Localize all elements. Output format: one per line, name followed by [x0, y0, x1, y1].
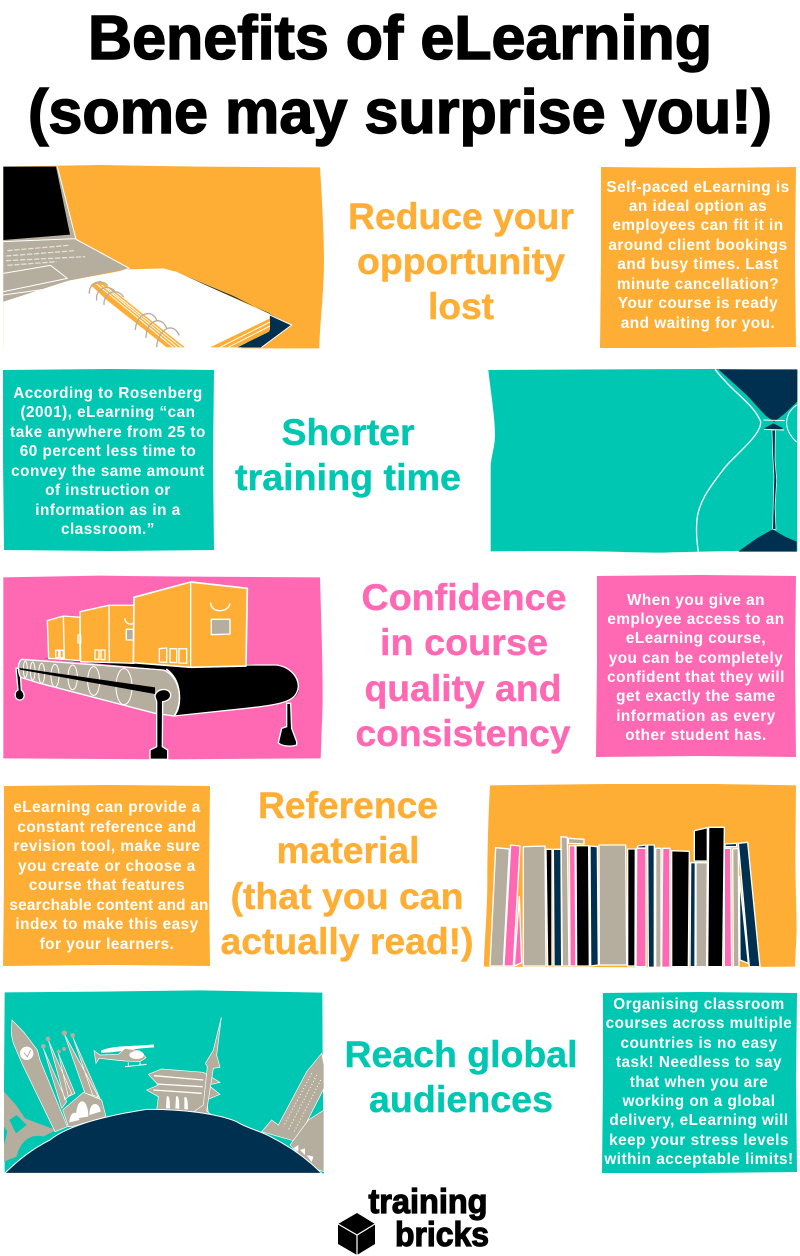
- text box: keep your stress levels: [609, 1132, 789, 1149]
- text box: According to Rosenberg: [13, 385, 203, 402]
- panel: reach global audiences: [4, 990, 797, 1173]
- panel: reduce your opportunity lost: [3, 165, 796, 349]
- text box: 60 percent less time to: [20, 443, 196, 460]
- text box: convey the same amount: [11, 463, 205, 480]
- text box: other student has.: [625, 727, 767, 744]
- text box: employee access to an: [607, 611, 785, 628]
- icon: skyscrapers: [262, 1053, 324, 1172]
- text box: that when you are: [630, 1074, 768, 1091]
- icon: Eiffel tower: [4, 1092, 56, 1162]
- text box: of instruction or: [45, 482, 171, 499]
- text box: index to make this easy: [15, 916, 199, 933]
- text box: take anywhere from 25 to: [10, 424, 206, 441]
- panel: reference material: [3, 784, 797, 967]
- logo: training bricks: [338, 1183, 489, 1255]
- heading: [348, 196, 574, 327]
- text box: Your course is ready: [618, 295, 778, 312]
- text box: and waiting for you.: [621, 315, 775, 332]
- text box: constant reference and: [17, 819, 197, 836]
- illustration: row of books: [484, 784, 797, 967]
- text box: countries is no easy: [620, 1035, 778, 1052]
- text box: [596, 575, 796, 757]
- heading: [220, 785, 474, 962]
- globe: [5, 1109, 322, 1173]
- text box: you create or choose a: [18, 858, 196, 875]
- heading: Reference: [258, 785, 438, 826]
- heading: Shorter: [282, 412, 414, 453]
- wordmark: bricks: [395, 1216, 489, 1254]
- heading: in course: [380, 622, 548, 663]
- text box: eLearning can provide a: [13, 799, 201, 816]
- text box: information as in a: [35, 502, 181, 519]
- text box: revision tool, make sure: [13, 838, 201, 855]
- text box: working on a global: [621, 1093, 776, 1110]
- heading: [356, 577, 571, 754]
- text box: eLearning course,: [626, 630, 766, 647]
- icon: cube: [338, 1213, 375, 1255]
- icon: Big Ben: [11, 1020, 67, 1132]
- text box: [600, 167, 796, 348]
- heading: opportunity: [357, 241, 565, 282]
- text box: Organising classroom: [613, 996, 785, 1013]
- text box: [3, 785, 210, 966]
- illustration: laptop and ring binder: [3, 165, 324, 349]
- heading: [344, 1034, 578, 1120]
- heading: audiences: [369, 1079, 553, 1120]
- text box: [3, 369, 214, 551]
- text box: and busy times. Last: [617, 256, 779, 273]
- text box: an ideal option as: [629, 198, 767, 215]
- text box: task! Needless to say: [616, 1054, 782, 1071]
- text box: searchable content and an: [9, 897, 209, 914]
- panel: shorter training time: [3, 369, 797, 553]
- icon: cathedral: [41, 1030, 106, 1127]
- text box: within acceptable limits!: [603, 1151, 794, 1168]
- title: [28, 4, 772, 147]
- title: (some may surprise you!): [28, 78, 772, 147]
- text box: confident that they will: [607, 669, 785, 686]
- text box: delivery, eLearning will: [609, 1112, 789, 1129]
- heading: training time: [235, 457, 461, 498]
- heading: Reach global: [344, 1034, 578, 1075]
- wordmark: training: [368, 1183, 488, 1221]
- heading: Reduce your: [348, 196, 574, 237]
- icon: helicopter: [94, 1044, 154, 1067]
- heading: [235, 412, 461, 498]
- text box: classroom.”: [61, 521, 155, 538]
- text box: course that features: [29, 877, 185, 894]
- text box: (2001), eLearning “can: [20, 404, 196, 421]
- illustration: hourglass: [488, 369, 797, 553]
- heading: quality and: [364, 668, 562, 709]
- text box: you can be completely: [609, 650, 783, 667]
- heading: (that you can: [230, 876, 464, 917]
- text box: information as every: [616, 708, 776, 725]
- text box: for your learners.: [40, 936, 174, 953]
- wordmark: [368, 1183, 489, 1254]
- heading: lost: [428, 286, 494, 327]
- text box: get exactly the same: [616, 688, 776, 705]
- panel: confidence in course quality: [3, 575, 796, 759]
- icon: pagoda and tower: [147, 1017, 221, 1114]
- illustration: world landmarks on globe: [4, 990, 324, 1173]
- text box: minute cancellation?: [617, 276, 779, 293]
- text box: [602, 992, 797, 1173]
- text box: When you give an: [627, 592, 765, 609]
- heading: consistency: [356, 713, 571, 754]
- text box: Self-paced eLearning is: [606, 179, 790, 196]
- text box: around client bookings: [608, 237, 788, 254]
- text box: employees can fit it in: [612, 217, 784, 234]
- heading: Confidence: [362, 577, 566, 618]
- title: Benefits of eLearning: [88, 4, 712, 73]
- text box: courses across multiple: [606, 1015, 792, 1032]
- heading: material: [276, 830, 420, 871]
- illustration: boxes on conveyor belt: [3, 576, 323, 759]
- heading: actually read!): [220, 921, 474, 962]
